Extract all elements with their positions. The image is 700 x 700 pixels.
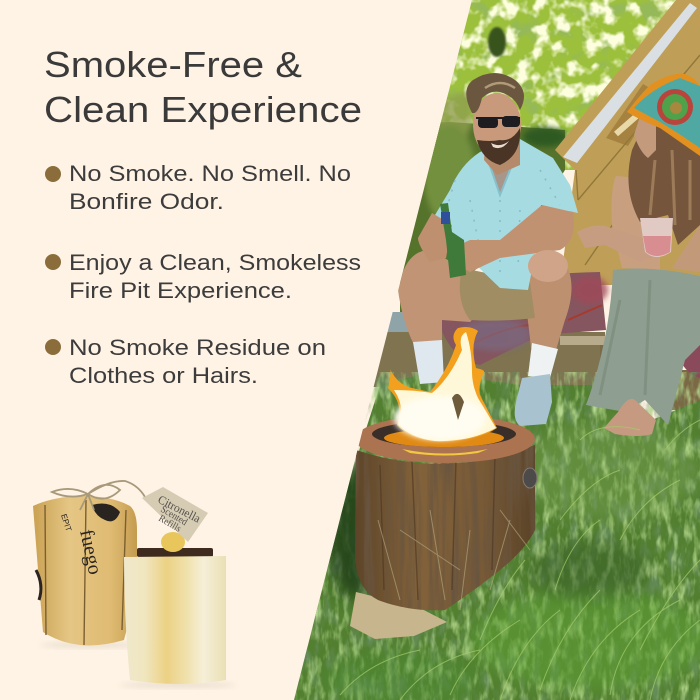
tag text: Refills — [156, 513, 183, 535]
tag text: Scented — [158, 504, 189, 528]
hair — [466, 73, 524, 113]
bottle — [440, 203, 466, 278]
neck and face — [484, 137, 520, 175]
wick — [161, 532, 185, 552]
grass field — [280, 372, 700, 700]
dry grass stems — [378, 510, 530, 610]
woman — [577, 74, 700, 436]
title — [44, 44, 362, 130]
bullet: no residue — [45, 335, 326, 388]
label text: EPIT — [59, 513, 73, 533]
forearm and hand — [577, 226, 618, 252]
bullet: no residue: Clothes or Hairs. — [69, 363, 258, 388]
paver stone — [350, 592, 447, 639]
flame — [388, 327, 497, 442]
fire pit stump — [350, 415, 540, 639]
knee highlight — [528, 250, 568, 282]
tag text: Citronella — [156, 492, 204, 526]
arms — [418, 213, 452, 262]
shorts — [460, 268, 535, 321]
wine glass — [640, 218, 673, 257]
brand logo — [92, 504, 120, 521]
sunglasses — [476, 116, 520, 128]
panel: campsite photo — [280, 0, 700, 700]
face — [634, 118, 656, 158]
cushions — [432, 272, 700, 378]
bullet: no residue: No Smoke Residue on — [69, 335, 326, 360]
stump body — [355, 445, 535, 610]
left leg — [398, 251, 472, 344]
hedge — [400, 90, 567, 320]
twine bow — [52, 481, 145, 510]
bullet: no smoke: No Smoke. No Smell. No — [69, 161, 351, 186]
shadows — [40, 642, 140, 648]
candle — [124, 556, 226, 684]
bullet: clean fire pit: Fire Pit Experience. — [69, 278, 292, 303]
kraft paper wrap — [33, 496, 137, 645]
bullet: no smoke: Bonfire Odor. — [69, 189, 224, 214]
beard — [477, 128, 520, 165]
bench — [370, 312, 700, 410]
stump top ring — [355, 415, 535, 463]
tent — [555, 0, 700, 285]
handle — [523, 468, 537, 488]
shoe — [515, 374, 552, 426]
shirt — [432, 139, 578, 290]
title: Clean Experience — [44, 89, 362, 130]
title: Smoke-Free & — [44, 44, 302, 85]
bullet: clean fire pit — [45, 250, 361, 303]
right leg — [528, 268, 572, 349]
shoulder and arm — [612, 176, 660, 270]
socks — [413, 340, 444, 384]
feet — [604, 399, 656, 436]
grass blades foreground — [340, 420, 700, 700]
crochet hat — [627, 74, 700, 156]
man — [398, 73, 578, 426]
candle lid — [137, 548, 213, 557]
bullet: no smoke — [45, 161, 351, 214]
product: citronella refills — [33, 481, 236, 688]
brand text: fuego — [75, 527, 106, 577]
hang tag — [142, 487, 208, 542]
bullet: clean fire pit: Enjoy a Clean, Smokeless — [69, 250, 361, 275]
hair — [628, 126, 700, 245]
trees background — [428, 0, 676, 170]
skirt — [586, 268, 700, 425]
